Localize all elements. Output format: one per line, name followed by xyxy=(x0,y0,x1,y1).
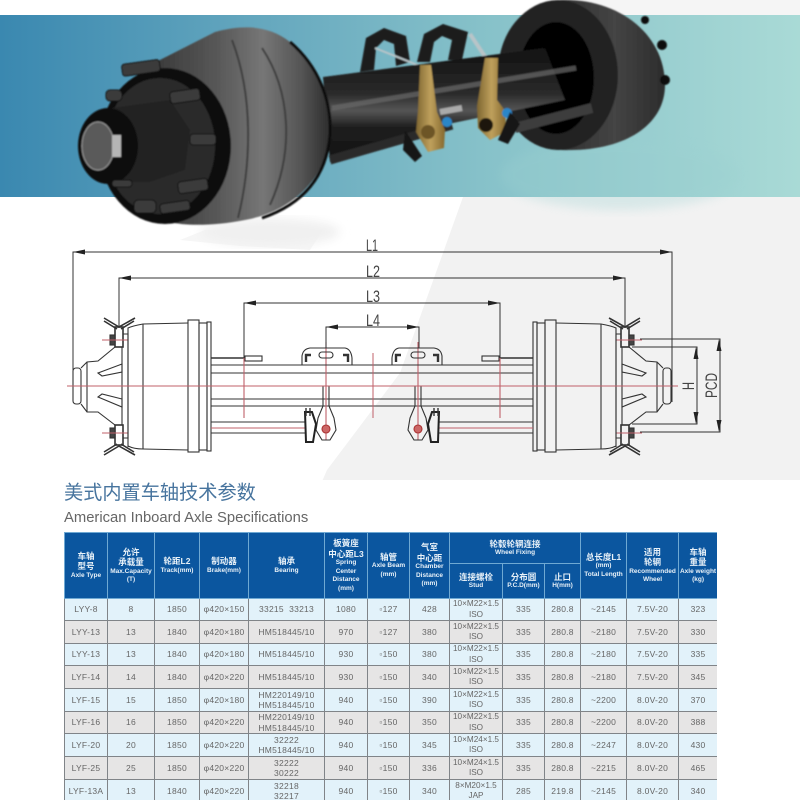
row LYY-8: 323 xyxy=(691,604,706,614)
dimension L3 xyxy=(244,287,500,358)
row LYF-16: HM518445/10 xyxy=(258,722,315,732)
table header row: 轮毂轮辋连接 xyxy=(490,538,541,548)
table header row: 中心距L3 xyxy=(328,548,364,558)
specifications table: Wheel xyxy=(643,576,662,583)
specifications table: Axle Beam xyxy=(372,562,405,569)
row LYF-25: φ420×220 xyxy=(204,763,244,773)
table header row xyxy=(65,533,717,598)
icon: hub and wheel studs xyxy=(78,59,231,224)
row LYY-8: 1850 xyxy=(167,604,187,614)
row LYF-16: 388 xyxy=(691,717,706,727)
row LYF-14: 1840 xyxy=(167,672,187,682)
specifications table: (mm) xyxy=(338,584,354,592)
row LYF-14: 335 xyxy=(516,672,531,682)
row LYF-20: 335 xyxy=(516,740,531,750)
row LYY-13 second: ▫150 xyxy=(379,649,398,659)
table header row: 总长度L1 xyxy=(586,552,621,562)
row LYF-16: 940 xyxy=(339,717,353,727)
row LYF-15: 8.0V-20 xyxy=(637,695,668,705)
dimension L1: L1 xyxy=(366,236,378,255)
row LYY-13 second: 10×M22×1.5 xyxy=(453,644,499,653)
specifications table: Spring Center xyxy=(336,559,356,574)
row LYF-14: 345 xyxy=(691,672,706,682)
row LYF-16: φ420×220 xyxy=(204,717,244,727)
row LYF-25: 30222 xyxy=(274,768,299,778)
row LYF-16: ~2200 xyxy=(591,717,616,727)
icon: axle tube xyxy=(323,48,592,162)
specifications table: (T) xyxy=(127,576,135,583)
row LYF-20: 430 xyxy=(691,740,706,750)
icon: front brake drum xyxy=(120,27,330,225)
table header row: Wheel Fixing xyxy=(495,549,535,556)
row LYY-13 second: 930 xyxy=(339,649,353,659)
row LYF-16: 280.8 xyxy=(551,717,574,727)
row LYY-13: φ420×180 xyxy=(204,627,244,637)
dimension L1 xyxy=(73,236,672,402)
row LYF-20: 32222 xyxy=(274,734,299,744)
row LYY-13 second: ISO xyxy=(469,654,483,664)
row LYY-8: ~2145 xyxy=(591,604,616,614)
row LYF-20: 8.0V-20 xyxy=(637,740,668,750)
row LYY-8: 10×M22×1.5 xyxy=(453,599,499,608)
row LYF-13A: φ420×220 xyxy=(204,786,244,796)
row LYY-13 second: HM518445/10 xyxy=(258,649,315,659)
table header row: 制动器 xyxy=(211,556,237,566)
table sub-header row: 分布圆 xyxy=(511,572,536,582)
row LYF-16: 8.0V-20 xyxy=(637,717,668,727)
table header row: 车轴 xyxy=(690,546,707,556)
row LYF-20: 940 xyxy=(339,740,353,750)
row LYF-14: 10×M22×1.5 xyxy=(453,666,499,676)
row LYF-15 xyxy=(65,689,717,711)
table sub-header row: H(mm) xyxy=(552,582,573,589)
row LYF-13A: 285 xyxy=(516,786,531,796)
row LYF-25: 10×M24×1.5 xyxy=(453,758,499,766)
table header row: 承载量 xyxy=(118,557,144,567)
row LYY-13: 335 xyxy=(516,627,531,637)
dimension PCD xyxy=(640,339,722,432)
row LYY-8: 335 xyxy=(516,604,531,614)
row LYY-13 second: φ420×180 xyxy=(204,649,244,659)
row LYF-13A: 940 xyxy=(339,786,353,796)
row LYF-15: 390 xyxy=(422,695,437,705)
row LYF-13A: ~2145 xyxy=(591,786,616,796)
dimension L4: L4 xyxy=(366,311,380,330)
row LYF-13A: 340 xyxy=(422,786,437,796)
row LYY-13 second: LYY-13 xyxy=(72,649,100,659)
row LYF-15: 1850 xyxy=(167,695,187,705)
icon: right slack adjuster xyxy=(477,58,520,144)
icon: mounting brackets xyxy=(360,24,486,72)
row LYY-8: 7.5V-20 xyxy=(637,604,668,614)
dimension L2: L2 xyxy=(366,262,380,281)
row LYF-20: ▫150 xyxy=(379,740,398,750)
row LYF-15: 280.8 xyxy=(551,695,574,705)
row LYY-13: 13 xyxy=(126,627,136,637)
row LYF-14: ISO xyxy=(469,677,483,686)
axle technical drawing xyxy=(67,236,722,456)
icon: left slack adjuster xyxy=(403,65,452,162)
specifications table: (mm) xyxy=(381,571,396,578)
row LYY-13 second: ~2180 xyxy=(591,649,616,659)
row LYY-13: 10×M22×1.5 xyxy=(453,622,499,630)
specifications table: Chamber xyxy=(415,563,444,570)
specifications table: Brake(mm) xyxy=(207,566,241,574)
row LYF-13A: 8×M20×1.5 xyxy=(455,780,497,790)
row LYF-16: 350 xyxy=(422,717,437,727)
row LYY-8: 8 xyxy=(128,604,133,614)
row LYF-20: 280.8 xyxy=(551,740,574,750)
row LYF-15: ~2200 xyxy=(591,695,616,705)
row LYY-13: 380 xyxy=(422,627,437,637)
table sub-header row: Stud xyxy=(469,582,483,589)
row LYF-25: 8.0V-20 xyxy=(637,763,668,773)
row LYF-25: ~2215 xyxy=(591,763,616,773)
table header row: 中心距 xyxy=(417,553,442,563)
row LYF-14: φ420×220 xyxy=(204,672,244,682)
table sub-header row xyxy=(450,564,580,598)
table header row: 重量 xyxy=(690,557,707,567)
row LYY-13 second xyxy=(65,644,717,665)
row LYF-25 xyxy=(65,757,717,779)
row LYF-20: HM518445/10 xyxy=(258,745,315,755)
right half of axle xyxy=(372,318,671,455)
row LYF-20: 1850 xyxy=(167,740,187,750)
specifications table: 型号 xyxy=(77,561,94,571)
row LYF-13A: LYF-13A xyxy=(69,786,103,796)
table header row: 板簧座 xyxy=(333,538,359,548)
row LYF-13A: 340 xyxy=(691,786,706,796)
row LYY-13: LYY-13 xyxy=(72,627,100,637)
row LYY-8: ISO xyxy=(469,610,483,618)
row LYF-25: LYF-25 xyxy=(72,763,100,773)
row LYF-25: ▫150 xyxy=(379,763,398,773)
table header row: 轮辋 xyxy=(644,557,661,567)
row LYF-25: 940 xyxy=(339,763,353,773)
table sub-header row: 止口 xyxy=(554,572,571,582)
row LYF-14: 14 xyxy=(126,672,136,682)
specifications table: (mm) xyxy=(422,580,437,587)
row LYY-8: 280.8 xyxy=(551,604,574,614)
row LYF-15: 15 xyxy=(126,695,136,705)
table header row: 车轴 xyxy=(77,551,94,561)
specifications table: Bearing xyxy=(274,566,299,574)
table header row: 轴管 xyxy=(380,552,397,562)
row LYY-13 second: 335 xyxy=(691,649,706,659)
row LYY-13 xyxy=(65,621,717,643)
dimension L4 xyxy=(326,311,419,348)
row LYY-8: LYY-8 xyxy=(74,604,98,614)
background and product photo banner xyxy=(0,0,800,480)
row LYY-13: 970 xyxy=(339,627,353,637)
row LYF-13A: ▫150 xyxy=(379,786,398,796)
row LYY-8: 33215 33213 xyxy=(259,604,314,614)
row LYF-15: 10×M22×1.5 xyxy=(453,690,499,698)
row LYF-16: 335 xyxy=(516,717,531,727)
row LYF-15: 335 xyxy=(516,695,531,705)
row LYF-14: HM518445/10 xyxy=(258,672,315,682)
row LYY-13: ISO xyxy=(469,632,483,641)
row LYY-13 second: 280.8 xyxy=(551,649,574,659)
row LYF-20: LYF-20 xyxy=(72,740,100,750)
specifications table: (kg) xyxy=(692,576,704,583)
table header row: 适用 xyxy=(644,546,661,556)
row LYF-13A: 32218 xyxy=(274,780,299,790)
row LYY-13 second: 7.5V-20 xyxy=(637,649,668,659)
row LYF-16 xyxy=(65,712,717,733)
row LYY-8 xyxy=(65,599,717,620)
row LYY-13: 330 xyxy=(691,627,706,637)
row LYF-25: 465 xyxy=(691,763,706,773)
row LYY-13 second: 335 xyxy=(516,649,531,659)
row LYY-13: HM518445/10 xyxy=(258,627,315,637)
row LYF-15: ▫150 xyxy=(379,695,398,705)
row LYF-15: HM220149/10 xyxy=(258,690,315,700)
specifications table: Axle Type xyxy=(71,572,101,579)
row LYF-25: 336 xyxy=(422,763,437,773)
row LYF-13A xyxy=(65,780,717,800)
row LYF-14: 930 xyxy=(339,672,353,682)
row LYF-25: 32222 xyxy=(274,758,299,768)
row LYF-15: 370 xyxy=(691,695,706,705)
row LYF-14: 7.5V-20 xyxy=(637,672,668,682)
row LYF-25: 335 xyxy=(516,763,531,773)
row LYY-8: 428 xyxy=(422,604,437,614)
row LYF-25: 1850 xyxy=(167,763,187,773)
row LYF-13A: 13 xyxy=(126,786,136,796)
row LYF-20: 20 xyxy=(126,740,136,750)
row LYF-20: 345 xyxy=(422,740,437,750)
row LYF-13A: JAP xyxy=(468,791,484,800)
table header row: 轴承 xyxy=(278,556,295,566)
row LYF-25: 25 xyxy=(126,763,136,773)
title: English: American Inboard Axle Specifications xyxy=(64,510,308,526)
dimension H: H xyxy=(679,382,698,390)
row LYF-20: 10×M24×1.5 xyxy=(453,734,499,744)
row LYF-16: HM220149/10 xyxy=(258,712,315,722)
row LYF-20: φ420×220 xyxy=(204,740,244,750)
row LYF-20: ~2247 xyxy=(591,740,616,750)
dimension PCD: PCD xyxy=(702,373,721,398)
row LYY-8: φ420×150 xyxy=(204,604,244,614)
row LYF-14 xyxy=(65,666,717,688)
row LYF-14: 340 xyxy=(422,672,437,682)
specifications table: Total Length xyxy=(584,571,623,578)
specifications table: Track(mm) xyxy=(161,566,193,574)
dimension L2 xyxy=(119,262,625,328)
row LYF-15: 940 xyxy=(339,695,353,705)
row LYF-14: 280.8 xyxy=(551,672,574,682)
dimension L3: L3 xyxy=(366,287,380,306)
row LYF-15: ISO xyxy=(469,700,483,709)
title: Chinese: 美式内置车轴技术参数 xyxy=(64,483,256,504)
icon: rear brake drum xyxy=(498,0,670,150)
table header row: 允许 xyxy=(122,546,140,556)
specifications table: Recommended xyxy=(629,568,676,574)
row LYF-15: φ420×180 xyxy=(204,695,244,705)
row LYF-15: LYF-15 xyxy=(72,695,100,705)
row LYF-25: ISO xyxy=(469,768,483,777)
specifications table: (mm) xyxy=(596,562,611,569)
table sub-header row: 连接螺栓 xyxy=(459,572,493,582)
row LYF-16: ISO xyxy=(469,722,483,732)
left half of axle xyxy=(73,318,372,455)
row LYF-16: LYF-16 xyxy=(72,717,100,727)
row LYF-16: 10×M22×1.5 xyxy=(453,712,499,721)
row LYF-14: LYF-14 xyxy=(72,672,100,682)
specifications table: Distance xyxy=(416,572,443,579)
row LYF-14: ~2180 xyxy=(591,672,616,682)
row LYF-20 xyxy=(65,734,717,756)
row LYY-13: ~2180 xyxy=(591,627,616,637)
row LYF-13A: 1840 xyxy=(167,786,187,796)
row LYF-13A: 8.0V-20 xyxy=(637,786,668,796)
row LYY-13: ▫127 xyxy=(379,627,398,637)
row LYF-16: 1850 xyxy=(167,717,187,727)
row LYF-25: 280.8 xyxy=(551,763,574,773)
row LYF-15: HM518445/10 xyxy=(258,700,315,710)
row LYY-8: ▫127 xyxy=(379,604,398,614)
row LYY-13 second: 13 xyxy=(126,649,136,659)
row LYF-16: ▫150 xyxy=(379,717,398,727)
specifications table: Distance xyxy=(332,576,360,583)
specifications table xyxy=(64,532,717,800)
table header row: 轮距L2 xyxy=(164,556,190,566)
row LYF-16: 16 xyxy=(126,717,136,727)
specifications table: Max.Capacity xyxy=(110,568,152,574)
centre line xyxy=(67,353,678,418)
table sub-header row: P.C.D(mm) xyxy=(507,582,540,589)
row LYY-13 second: 1840 xyxy=(167,649,187,659)
specifications table: Axle weight xyxy=(680,568,716,574)
dimension H xyxy=(632,347,698,424)
row LYY-13 second: 380 xyxy=(422,649,437,659)
row LYF-14: ▫150 xyxy=(379,672,398,682)
row LYY-13: 1840 xyxy=(167,627,187,637)
row LYF-20: ISO xyxy=(469,745,483,754)
row LYY-13: 280.8 xyxy=(551,627,574,637)
row LYY-13: 7.5V-20 xyxy=(637,627,668,637)
row LYY-8: 1080 xyxy=(336,604,356,614)
table header row: 气室 xyxy=(421,542,438,552)
row LYF-13A: 219.8 xyxy=(551,786,574,796)
